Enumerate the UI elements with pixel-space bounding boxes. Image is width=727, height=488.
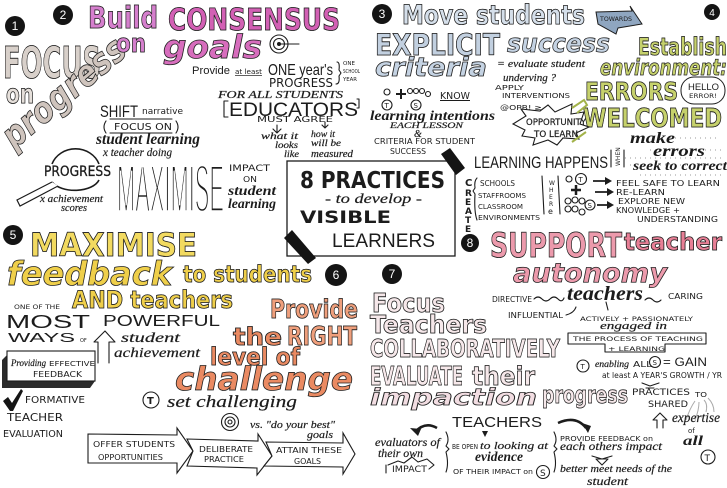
heading: move students explicit success criteria: EXPLICIT (375, 28, 500, 62)
icons and outcomes with arrows: T (578, 176, 584, 184)
one year's progress text: ONE year's (268, 62, 333, 79)
practices shared expertise of all: PRACTICES (632, 388, 690, 398)
number badge 4: 4 (709, 8, 715, 19)
create where list: C (465, 178, 472, 189)
teachers traits: teachers (567, 283, 643, 305)
heading: provide the right level of challenge: Provide (270, 295, 358, 325)
practices shared expertise of all: T (704, 454, 710, 464)
panel 1: focus on progress (0, 16, 277, 227)
icons and outcomes with arrows: EXPLORE NEW (618, 197, 686, 206)
column: evaluators of their own impact: their own (378, 446, 423, 460)
enabling all students gain growth: at least A YEAR'S GROWTH / YR (602, 371, 722, 380)
set challenging goals text: T (147, 396, 154, 407)
column: be open to looking at evidence: to looking at (480, 440, 549, 452)
number badge 3: 3 (379, 7, 386, 21)
enabling all students gain growth: enabling (595, 359, 630, 369)
heading: build consensus on goals: goals (163, 28, 262, 66)
create where list: ENVIRONMENTS (478, 214, 541, 222)
arrow: deliberate practice: PRACTICE (204, 455, 244, 464)
maximise impact on student learning: ON (243, 175, 257, 184)
panel 7: focus teachers collaboratively (370, 264, 672, 488)
learning intentions text with icons: CRITERIA FOR STUDENT (374, 137, 475, 146)
number badge 5: 5 (10, 228, 17, 242)
create where list: R (465, 189, 472, 199)
number badge 7: 7 (389, 267, 396, 281)
maximise impact on student learning: student (227, 184, 277, 199)
create where list: E (549, 194, 553, 201)
heading: focus teachers collaboratively evaluate their impact on progress (370, 289, 628, 411)
shift narrative text: student learning (95, 131, 200, 148)
box: process of teaching and learning (568, 333, 706, 353)
heading: provide the right level of challenge: level of (210, 343, 301, 371)
evaluate note: APPLY (495, 84, 525, 92)
number badge 1 (5, 16, 25, 36)
educators must agree text: looks (275, 140, 299, 150)
panel 8: support teacher autonomy (461, 226, 722, 464)
speech bubble: hello error (681, 77, 725, 104)
box: process of teaching and learning: + LEARNING (608, 345, 665, 353)
arrow: attain these goals: GOALS (294, 457, 321, 466)
evaluate note: underving ? (503, 72, 556, 84)
box: providing effective feedback: EFFECTIVE (49, 360, 95, 368)
evaluate note: = evaluate student (497, 58, 586, 70)
shift narrative text: SHIFT (100, 102, 138, 121)
heading: focus on progress: on (6, 79, 34, 110)
create where list: R (549, 201, 553, 208)
teachers traits: ACTIVELY + PASSIONATELY (580, 315, 693, 323)
one year's progress text: YEAR (342, 77, 358, 83)
most powerful ways text: OF (80, 338, 87, 344)
educators must agree text: MUST AGREE (257, 115, 333, 124)
practices shared expertise of all (632, 388, 720, 464)
enabling all students gain growth: ALL (633, 360, 653, 369)
panel 4: establish environment errors welcomed (465, 4, 727, 235)
heading: provide the right level of challenge: the (233, 323, 282, 351)
create where list: E (465, 225, 471, 235)
centre title card: - to develop - (325, 192, 422, 207)
learning intentions text with icons: SUCCESS (390, 147, 426, 156)
enabling all students gain growth: = GAIN (663, 355, 707, 369)
icons and outcomes with arrows: KNOWLEDGE + (616, 206, 680, 215)
starburst: opportunity to learn: TO LEARN (533, 130, 578, 140)
panel 5: maximise feedback (2, 225, 312, 440)
practices shared expertise of all: all (683, 434, 703, 449)
heading: support teacher autonomy: teacher (624, 228, 722, 256)
heading: focus teachers collaboratively evaluate their impact on progress: Teachers (370, 310, 487, 339)
centre title card (284, 148, 465, 264)
set challenging goals text: goals (307, 429, 333, 441)
learning intentions text with icons (370, 88, 496, 156)
most powerful ways text: POWERFUL (103, 313, 220, 330)
learning intentions text with icons: learning intentions (370, 109, 496, 124)
icons and outcomes with arrows: S (588, 202, 592, 210)
educators must agree text (217, 90, 359, 160)
heading: provide the right level of challenge (175, 295, 358, 398)
learning intentions text with icons: EACH LESSON (389, 121, 464, 130)
maximise impact on student learning: learning (228, 197, 276, 212)
heading: move students explicit success criteria (375, 0, 610, 83)
formative teacher evaluation: FORMATIVE (25, 395, 85, 406)
arrow: deliberate practice (187, 434, 272, 475)
make errors seek to correct: errors (653, 143, 705, 160)
create where list: SCHOOLS (480, 179, 515, 188)
centre title card: 8 PRACTICES (300, 168, 445, 194)
learning happens (474, 147, 624, 172)
heading: move students explicit success criteria: success (507, 29, 610, 59)
teachers traits: DIRECTIVE (492, 295, 532, 304)
teachers traits: CARING (668, 292, 703, 301)
educators must agree text: what it (261, 131, 299, 141)
arrow: attain these goals: ATTAIN THESE (276, 446, 342, 455)
learning intentions text with icons: T (384, 102, 390, 110)
column: provide feedback on each other's impact: PROVIDE FEEDBACK on (560, 435, 653, 443)
learning intentions text with icons: KNOW (440, 91, 470, 102)
set challenging goals text: set challenging (167, 392, 297, 411)
enabling all students gain growth: T (580, 363, 586, 371)
box: process of teaching and learning: THE PROCESS OF TEACHING (572, 335, 703, 343)
create where list: H (549, 187, 554, 194)
shift narrative text (95, 102, 200, 159)
create where list: T (465, 216, 472, 226)
column: provide feedback on each other's impact: better meet needs of the (560, 463, 672, 475)
heading: maximise feedback to students and teachers: to students (183, 262, 312, 288)
number badge 3 (372, 4, 392, 24)
arrow: attain these goals (264, 433, 355, 474)
column: provide feedback on each other's impact (560, 435, 672, 488)
column: evaluators of their own impact (375, 432, 449, 475)
shift narrative text: x teacher doing (102, 145, 172, 159)
set challenging goals text: vs. "do your best" (250, 419, 335, 431)
starburst: opportunity to learn: OPPORTUNITY (526, 118, 587, 128)
evaluate note: INTERVENTIONS (502, 92, 571, 100)
one year's progress text: Provide (192, 65, 230, 77)
shift narrative text: narrative (142, 107, 183, 117)
number badge 5 (3, 225, 23, 245)
icon: check mark (3, 389, 23, 411)
arrow: offer students opportunities: OPPORTUNITIES (98, 453, 163, 462)
heading: focus teachers collaboratively evaluate their impact on progress: COLLABORATIVELY (370, 334, 561, 363)
heading: focus teachers collaboratively evaluate their impact on progress: EVALUATE (370, 362, 463, 392)
one year's progress text: at least (235, 68, 262, 76)
most powerful ways text (6, 304, 220, 363)
magnifier: progress: PROGRESS (44, 164, 111, 180)
maximise impact on student learning: IMPACT (229, 164, 271, 174)
teachers traits: INFLUENTIAL (508, 311, 564, 320)
learning happens: LEARNING HAPPENS (474, 153, 608, 172)
arrow: offer students opportunities (88, 428, 193, 473)
one year's progress text: PROGRESS (269, 76, 333, 90)
educators must agree text: FOR ALL STUDENTS (217, 90, 343, 101)
number badge 8: 8 (467, 236, 474, 250)
speech bubble: hello error: ERROR! (689, 93, 717, 100)
heading: focus teachers collaboratively evaluate their impact on progress: their (472, 362, 535, 392)
make errors seek to correct: make (630, 130, 675, 147)
icon: target (270, 35, 299, 53)
speech bubble: hello error: HELLO (688, 82, 719, 93)
panel 3: move students towards explicit success criteria (370, 0, 642, 156)
most powerful ways text: ONE OF THE (14, 304, 60, 311)
formative teacher evaluation (3, 395, 85, 440)
arrow: offer students opportunities: OFFER STUDENTS (93, 440, 175, 449)
number badge 2 (53, 5, 73, 25)
column: be open to looking at evidence: BE OPEN (452, 443, 478, 451)
heading: build consensus on goals: CONSENSUS (168, 3, 340, 38)
set challenging goals text (143, 392, 335, 441)
process arrows (88, 428, 355, 475)
heading: focus teachers collaboratively evaluate their impact on progress: impaction (370, 385, 537, 411)
make errors seek to correct: seek to correct (632, 159, 727, 174)
column: be open to looking at evidence: OF THEIR IMPACT on (453, 468, 533, 476)
text: MAXIMISE (117, 151, 224, 227)
educators must agree text: will be (311, 138, 341, 148)
create where list: A (465, 207, 472, 217)
practices shared expertise of all: TO (694, 391, 708, 399)
learning intentions text with icons: & (414, 129, 422, 140)
educators must agree text: how it (311, 129, 336, 139)
educators must agree text: like (284, 149, 299, 159)
number badge 2: 2 (60, 8, 67, 22)
panel 2: build consensus on goals (53, 1, 360, 160)
teachers label with arrows (410, 414, 591, 437)
educators must agree text: measured (311, 149, 354, 160)
column: provide feedback on each other's impact: student (587, 474, 629, 488)
practices shared expertise of all: expertise (672, 411, 720, 426)
heading: provide the right level of challenge: challenge (175, 360, 353, 398)
teachers traits (492, 283, 703, 332)
heading: maximise feedback to students and teachers: AND teachers (72, 286, 233, 314)
practices shared expertise of all: SHARED (648, 400, 688, 410)
heading: support teacher autonomy (490, 226, 722, 289)
teachers traits: engaged in (600, 320, 668, 332)
create where list (465, 176, 560, 235)
starburst: opportunity to learn (513, 100, 589, 145)
column: be open to looking at evidence: S (540, 469, 546, 479)
magnifier: progress (17, 149, 111, 214)
number badge 7 (382, 264, 402, 284)
practices shared expertise of all: of (688, 427, 695, 435)
arrow: towards (596, 6, 642, 34)
educators must agree text: EDUCATORS (229, 100, 358, 121)
box: providing effective feedback (2, 351, 95, 388)
magnifier: progress: scores (61, 203, 87, 214)
make errors seek to correct (625, 130, 727, 175)
enabling all students gain growth (577, 355, 722, 388)
heading: focus teachers collaboratively evaluate their impact on progress: progress (542, 381, 628, 409)
arrow: towards: TOWARDS (599, 16, 632, 23)
magnifier: progress: x achievement (39, 193, 104, 205)
heading: focus teachers collaboratively evaluate their impact on progress: Focus (372, 289, 445, 319)
create where list: W (549, 180, 555, 187)
learning happens: WHEN (615, 147, 622, 166)
heading: maximise feedback to students and teachers (7, 226, 312, 314)
evaluate note (495, 58, 586, 112)
heading: support teacher autonomy: SUPPORT (490, 226, 623, 266)
create where list: e (548, 207, 553, 216)
centre title card: VISIBLE (300, 208, 391, 228)
heading: build consensus on goals: on (116, 29, 146, 59)
create where list: CLASSROOM (478, 203, 523, 211)
one year's progress text: SCHOOL (343, 69, 360, 75)
formative teacher evaluation: TEACHER (6, 411, 63, 424)
one year's progress text: ONE (343, 61, 355, 67)
create where list: STAFFROOMS (478, 192, 527, 200)
column: evaluators of their own impact: IMPACT (392, 465, 428, 475)
most powerful ways text: student (121, 331, 182, 346)
most powerful ways text: WAYS (8, 330, 76, 345)
most powerful ways text: MOST (6, 312, 90, 332)
one year's progress text (192, 61, 360, 90)
formative teacher evaluation: EVALUATION (3, 429, 63, 440)
maximise impact on student learning (117, 151, 277, 227)
number badge 1: 1 (12, 19, 19, 33)
column: provide feedback on each other's impact: each others impact (560, 439, 663, 453)
shift narrative text: FOCUS ON (114, 122, 172, 133)
number badge 6: 6 (333, 268, 340, 282)
icons and outcomes with arrows: UNDERSTANDING (637, 215, 718, 224)
teachers label with arrows: TEACHERS (452, 414, 542, 431)
box: providing effective feedback: Providing (10, 358, 46, 368)
number badge 8 (461, 234, 479, 252)
create where list: E (465, 198, 471, 208)
heading: move students explicit success criteria: criteria (375, 53, 487, 83)
arrow: deliberate practice: DELIBERATE (199, 445, 253, 454)
heading: establish environment errors welcomed: ERRORS (585, 77, 678, 106)
icons and outcomes with arrows: RE-LEARN (616, 188, 665, 197)
box: providing effective feedback: FEEDBACK (33, 370, 83, 379)
enabling all students gain growth: S (652, 359, 658, 367)
column: evaluators of their own impact: evaluators of (375, 435, 442, 449)
heading: build consensus on goals: Build (88, 1, 158, 36)
heading: build consensus on goals (88, 1, 340, 66)
learning intentions text with icons: S (414, 102, 418, 110)
most powerful ways text: achievement (114, 346, 201, 361)
column: be open to looking at evidence: evidence (475, 450, 523, 465)
column: be open to looking at evidence (452, 432, 557, 479)
icons and outcomes with arrows (565, 174, 720, 224)
heading: maximise feedback to students and teachers: MAXIMISE (30, 226, 197, 264)
centre title card: LEARNERS (332, 231, 435, 252)
heading: provide the right level of challenge: RIGHT (287, 322, 357, 352)
heading: support teacher autonomy: autonomy (513, 258, 668, 289)
heading: establish environment errors welcomed (583, 33, 727, 134)
heading: move students explicit success criteria: Move students (402, 0, 585, 31)
heading: maximise feedback to students and teachers: feedback (7, 254, 174, 293)
number badge 6 (325, 264, 347, 286)
icons and outcomes with arrows: FEEL SAFE TO LEARN (616, 179, 720, 188)
number badge 4 (704, 4, 720, 20)
panel 6: provide the right level of challenge (88, 264, 358, 475)
evaluate note: @OPB! ≥ (500, 104, 542, 112)
heading: focus on progress: FOCUS (3, 38, 101, 89)
